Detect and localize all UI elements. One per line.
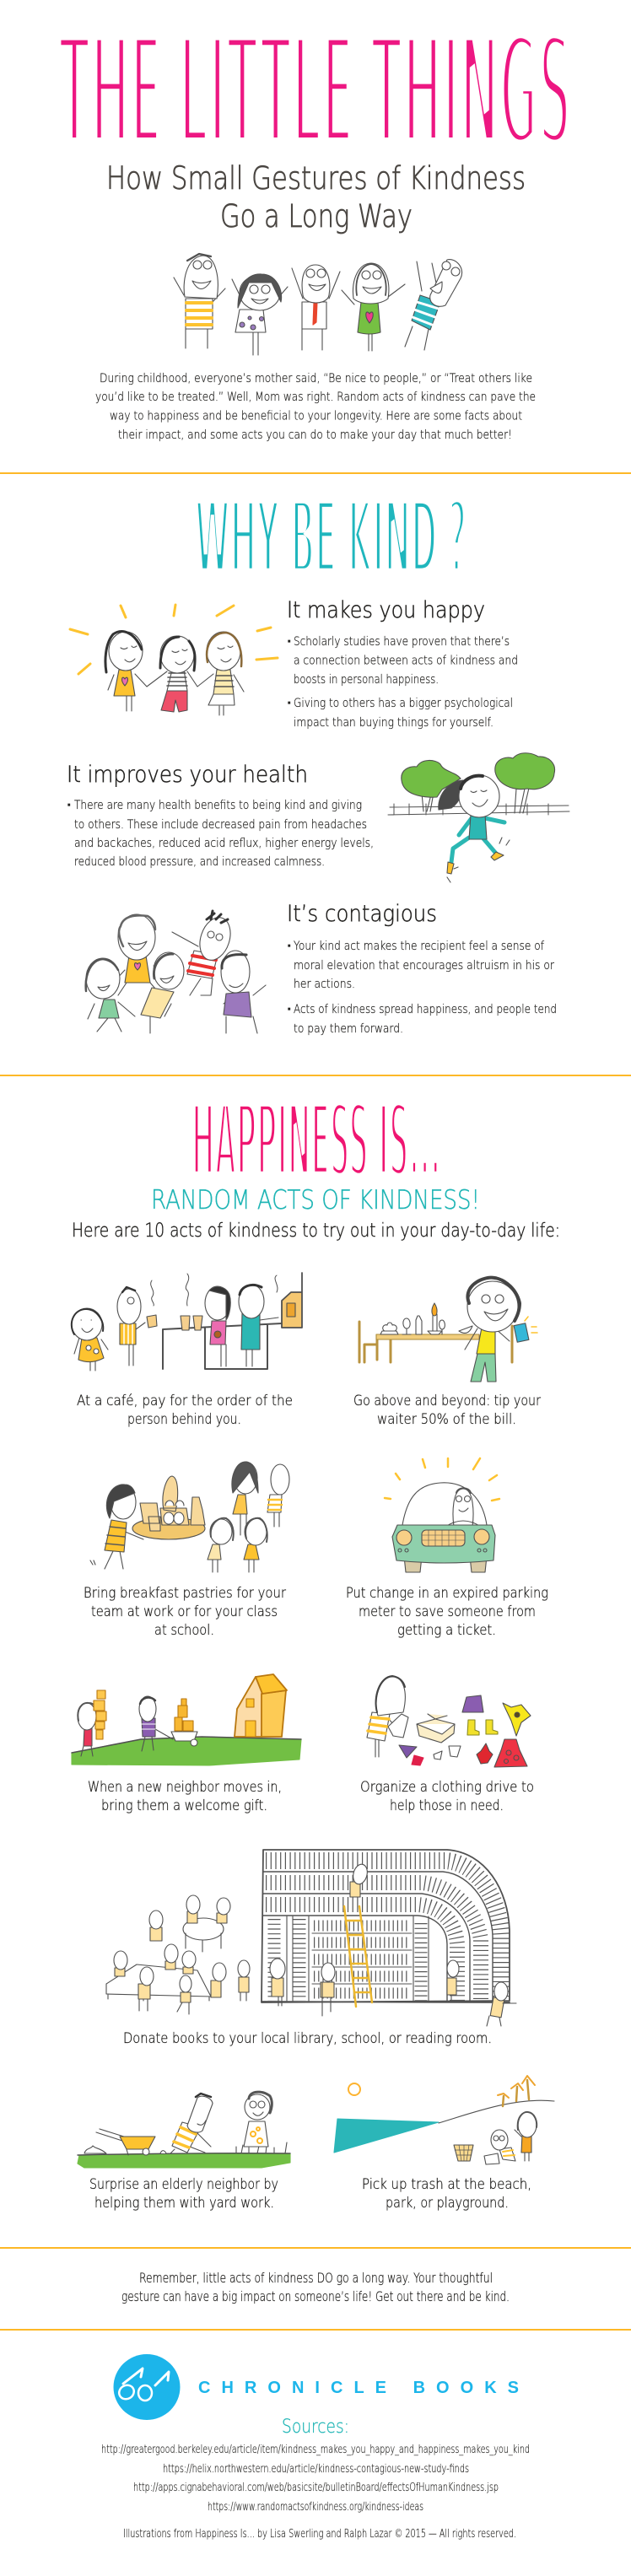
caption: parking meter — [346, 1585, 548, 1638]
source links — [101, 2444, 530, 2514]
reason: it improves your health: and backaches, reduced acid reflux, higher energy levels, — [74, 837, 374, 850]
caption: library: Donate books to your local library, school, or reading room. — [123, 2030, 492, 2046]
caption: tip — [353, 1393, 541, 1427]
caption: clothing — [360, 1779, 534, 1813]
reason: it's contagious: · — [287, 940, 292, 953]
illustration: beach cleanup — [334, 2076, 554, 2164]
subtitle: Go a Long Way — [220, 198, 413, 234]
caption: pastries: at school. — [154, 1622, 214, 1638]
caption: parking meter: Put change in an expired parking — [346, 1585, 548, 1601]
section intro: Here are 10 acts of kindness to try out in your day-to-day life: — [72, 1221, 560, 1242]
reason: it improves your health: to others. These include decreased pain from headaches — [74, 818, 367, 832]
caption: beach: Pick up trash at the beach, — [362, 2176, 531, 2192]
closing message — [121, 2270, 510, 2304]
caption: tip: waiter 50% of the bill. — [377, 1411, 516, 1427]
sources heading: Sources: — [282, 2417, 349, 2438]
caption: cafe: person behind you. — [127, 1411, 241, 1427]
title: THE LITTLE THINGS — [58, 0, 572, 184]
caption: yard work — [89, 2176, 278, 2211]
reason: it's contagious: · — [287, 1003, 292, 1016]
reason: it's contagious: moral elevation that encourages altruism in his or — [294, 959, 554, 973]
illustration: breakfast pastries for the team — [90, 1462, 289, 1572]
reason: it makes you happy: · — [287, 635, 292, 649]
publisher name: CHRONICLE BOOKS — [198, 2379, 519, 2397]
reason: it makes you happy: · — [287, 697, 292, 710]
caption: pastries: Bring breakfast pastries for your — [84, 1585, 286, 1601]
caption: pastries: team at work or for your class — [91, 1603, 278, 1619]
illustration: library reading room — [106, 1850, 516, 2026]
reason: it's contagious: Your kind act makes the recipient feel a sense of — [294, 940, 545, 953]
illustration: clothing drive — [367, 1676, 531, 1767]
source links: https://www.randomactsofkindness.org/kindness-ideas — [208, 2501, 423, 2514]
reason: it improves your health: There are many health benefits to being kind and giving — [74, 799, 362, 812]
illustration: cafe queue — [72, 1273, 302, 1371]
illustration: car at parking meter — [385, 1458, 499, 1572]
reason: it makes you happy: boosts in personal happiness. — [294, 673, 439, 687]
caption: yard work: Surprise an elderly neighbor by — [89, 2176, 278, 2192]
ladder — [344, 1906, 372, 2007]
reason: it improves your health: reduced blood pressure, and increased calmness. — [74, 855, 325, 869]
closing message: Remember, little acts of kindness DO go a long way. Your thoughtful — [139, 2270, 493, 2286]
source links: https://helix.northwestern.edu/article/kindness-contagious-new-study-finds — [163, 2463, 469, 2476]
subtitle: How Small Gestures of Kindness — [106, 160, 526, 197]
subtitle — [106, 160, 526, 234]
reason: it's contagious: Acts of kindness spread happiness, and people tend — [294, 1003, 557, 1016]
caption: neighbor: When a new neighbor moves in, — [88, 1779, 282, 1795]
reason: it improves your health: It improves your health — [67, 762, 308, 788]
intro paragraph: way to happiness and be beneficial to your longevity. Here are some facts about — [110, 410, 522, 423]
reason: it makes you happy: Scholarly studies have proven that there’s — [294, 635, 510, 649]
caption: pastries — [84, 1585, 286, 1638]
illustration: welcoming a new neighbor — [72, 1674, 301, 1765]
caption: beach: park, or playground. — [386, 2195, 509, 2211]
caption: neighbor — [88, 1779, 282, 1813]
readers at the tables — [106, 1895, 250, 2014]
reason: it makes you happy: Giving to others has a bigger psychological — [294, 697, 513, 710]
intro paragraph: their impact, and some acts you can do to make your day that much better! — [118, 428, 512, 442]
reason: it's contagious — [287, 901, 557, 1036]
caption: cafe — [77, 1393, 293, 1427]
caption: parking meter: getting a ticket. — [397, 1622, 496, 1638]
caption: parking meter: meter to save someone from — [359, 1603, 536, 1619]
section heading: why be kind: WHY BE KIND ? — [195, 477, 467, 599]
caption: neighbor: bring them a welcome gift. — [101, 1797, 267, 1813]
closing message: gesture can have a big impact on someone’s life! Get out there and be kind. — [121, 2288, 510, 2304]
reason: it makes you happy: It makes you happy — [287, 597, 485, 623]
reason: it improves your health — [67, 762, 374, 869]
reason: it's contagious: to pay them forward. — [294, 1022, 403, 1036]
caption: yard work: helping them with yard work. — [94, 2195, 274, 2211]
intro paragraph: you’d like to be treated.” Well, Mom was right. Random acts of kindness can pave the — [95, 391, 536, 404]
reason: it makes you happy: impact than buying things for yourself. — [294, 716, 493, 730]
bookshelf — [262, 1850, 510, 2002]
illustration: three friends holding hands — [70, 605, 278, 715]
reason: it makes you happy: a connection between acts of kindness and — [294, 655, 518, 668]
caption: clothing: Organize a clothing drive to — [360, 1779, 534, 1795]
section heading: happiness is: HAPPINESS IS... — [191, 1081, 440, 1203]
illustration: five cheering friends — [174, 254, 462, 355]
intro paragraph — [95, 372, 536, 442]
caption: clothing: help those in need. — [390, 1797, 504, 1813]
logo: chronicle books glasses badge — [113, 2354, 181, 2420]
reason: it's contagious: It’s contagious — [287, 901, 437, 927]
source links: http://apps.cignabehavioral.com/web/basicsite/bulletinBoard/effectsOfHumanKindness.jsp — [133, 2482, 499, 2494]
illustration: girl running past trees — [388, 753, 569, 882]
caption: beach — [362, 2176, 531, 2211]
section subheading: RANDOM ACTS OF KINDNESS! — [151, 1185, 480, 1215]
illustration: group of friends dancing — [86, 911, 266, 1033]
intro paragraph: During childhood, everyone’s mother said, “Be nice to people,” or “Treat others like — [100, 372, 532, 385]
reason: it's contagious: her actions. — [294, 978, 355, 991]
illustration: generous tip at dinner — [359, 1278, 537, 1382]
caption: tip: Go above and beyond: tip your — [353, 1393, 541, 1409]
readers at the shelves — [270, 1862, 516, 2026]
reason: it makes you happy — [287, 597, 518, 730]
illustration: yard work for an elderly neighbor — [78, 2092, 290, 2168]
reason: it improves your health: · — [67, 799, 72, 812]
caption: cafe: At a café, pay for the order of the — [77, 1393, 293, 1409]
